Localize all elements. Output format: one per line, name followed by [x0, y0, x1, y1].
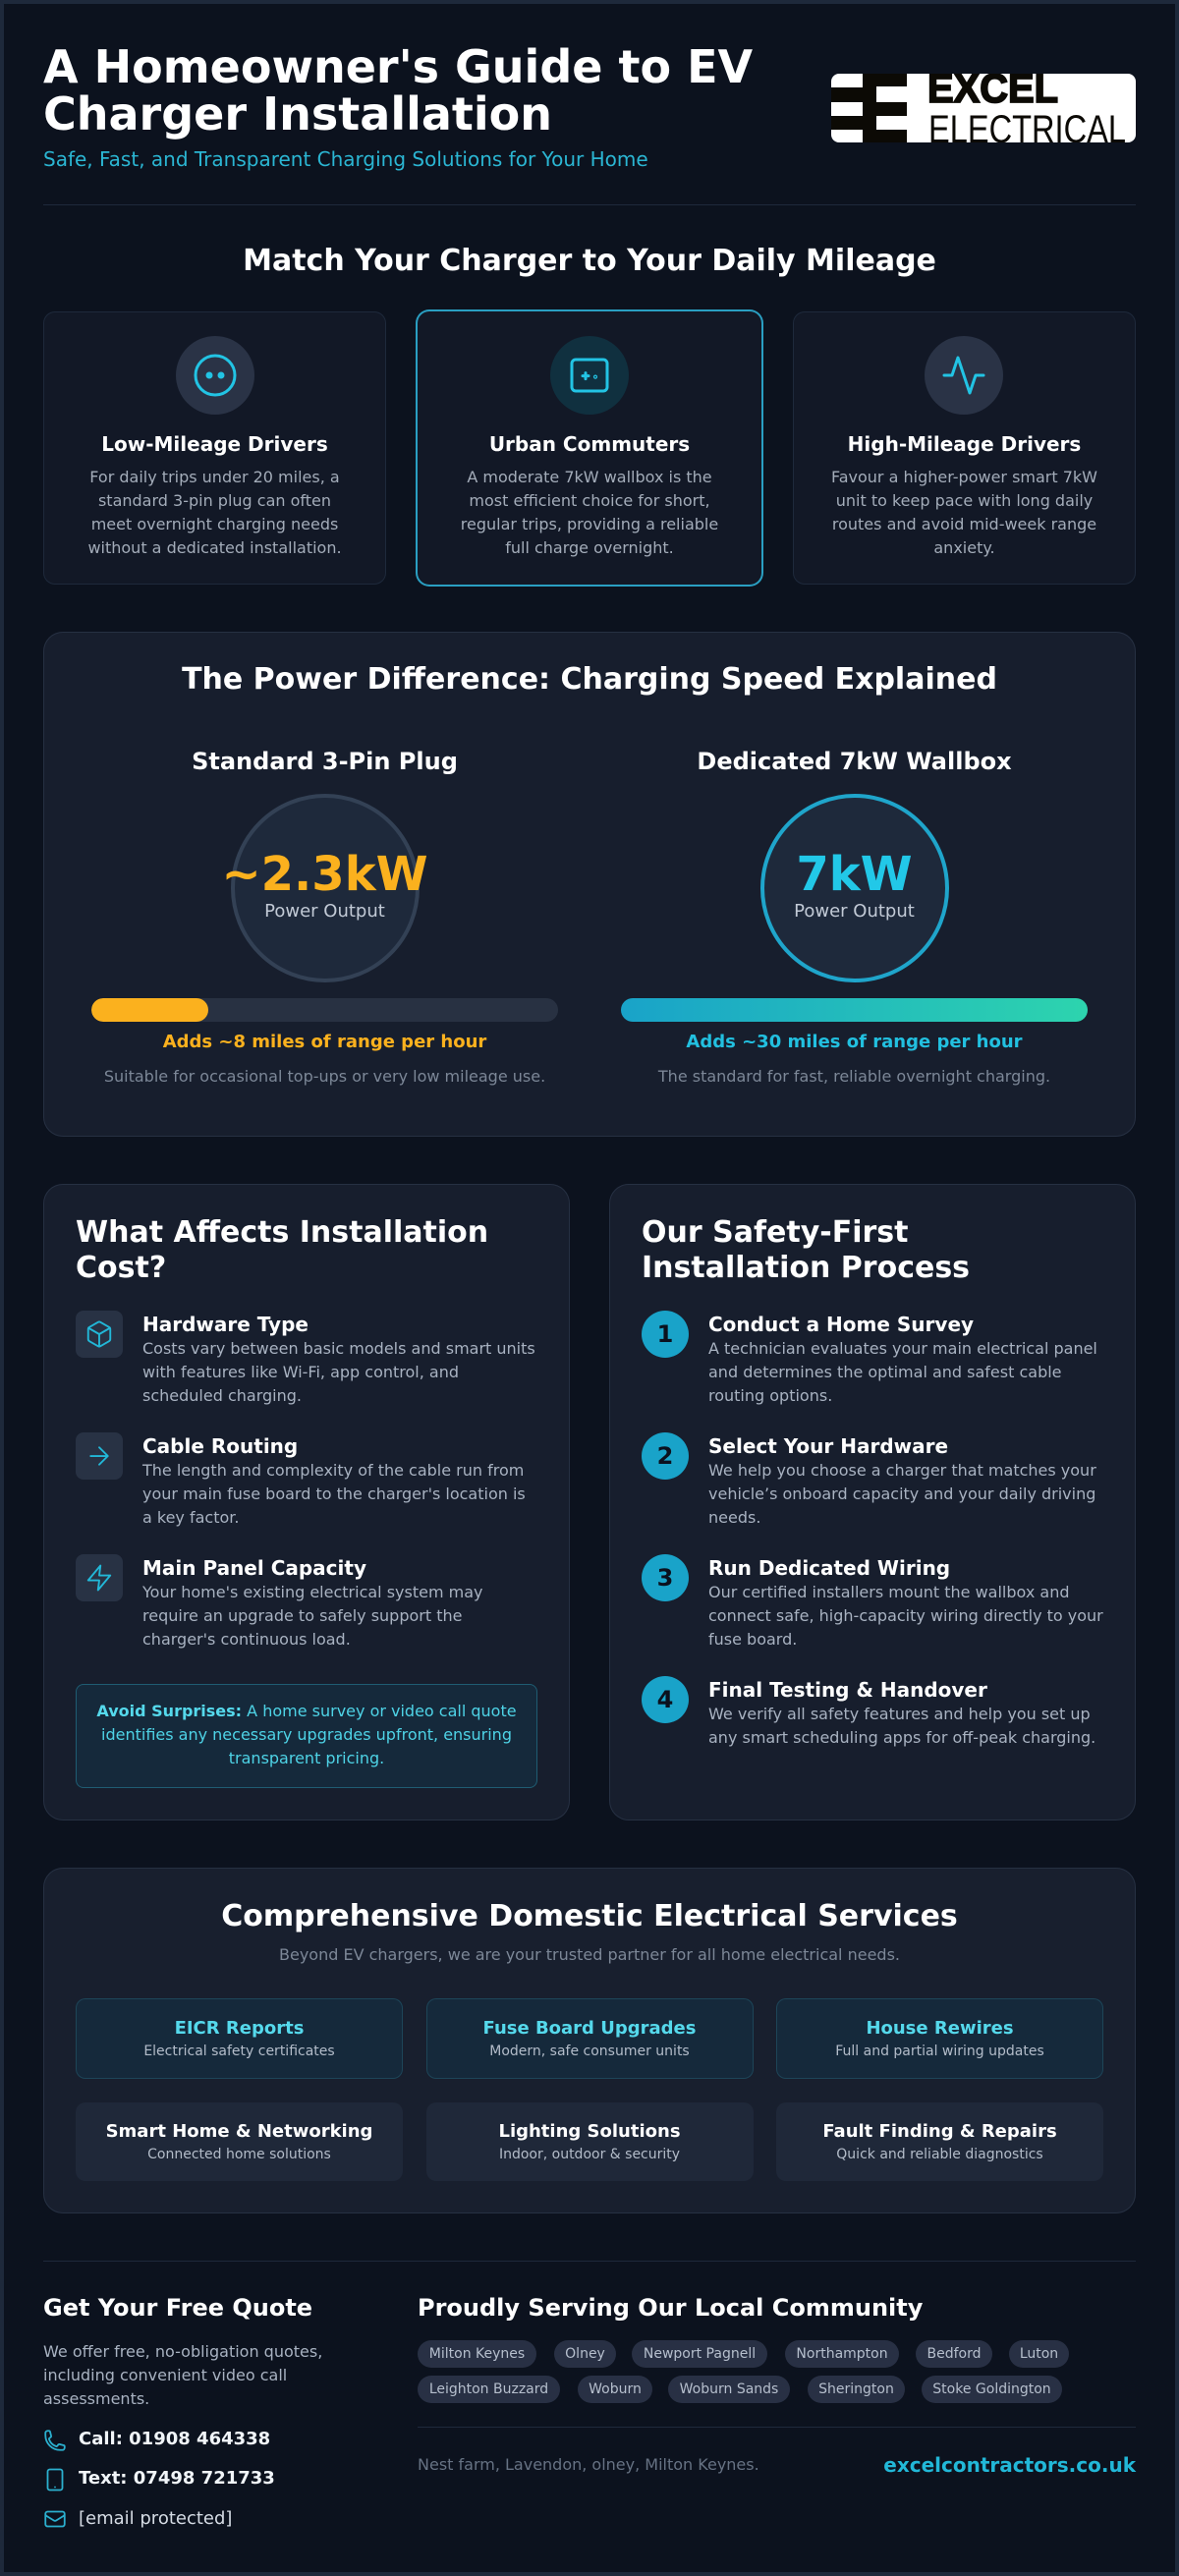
- heading: [76, 1215, 488, 1285]
- step text: connect safe, high-capacity wiring directly to your: [708, 1606, 1103, 1625]
- card text: unit to keep pace with long daily: [836, 491, 1093, 510]
- range text: Adds ~30 miles of range per hour: [686, 1032, 1023, 1052]
- service: EICR reports: [76, 1998, 403, 2079]
- icon: bolt: [76, 1554, 123, 1601]
- card text: regular trips, providing a reliable: [461, 515, 718, 533]
- bar chart: [91, 998, 558, 1022]
- step text: [708, 1705, 1095, 1747]
- panel: urban commuters: [416, 309, 763, 587]
- value label: Power Output: [794, 901, 915, 922]
- service: smart home: [76, 2102, 403, 2181]
- location tags: Sherington: [818, 2381, 894, 2397]
- step text: [708, 1339, 1097, 1405]
- step title: Select Your Hardware: [708, 1434, 948, 1458]
- logo: Excel Electrical: [831, 74, 1136, 142]
- service: smart home: Connected home solutions: [147, 2147, 331, 2162]
- location tags: Northampton: [796, 2346, 888, 2362]
- value: 7kW: [796, 847, 913, 902]
- item text: require an upgrade to safely support the: [142, 1606, 462, 1625]
- card text: anxiety.: [933, 538, 995, 557]
- value: ~2.3kW: [221, 847, 428, 902]
- step number: [642, 1676, 689, 1723]
- step title: Final Testing & Handover: [708, 1678, 987, 1702]
- item text: a key factor.: [142, 1508, 239, 1527]
- card text: For daily trips under 20 miles, a: [89, 468, 340, 486]
- heading: The Power Difference: Charging Speed Explained: [182, 662, 997, 697]
- gauge circle: [230, 794, 419, 982]
- quote text: We offer free, no-obligation quotes,: [43, 2342, 322, 2361]
- icon: cube: [76, 1311, 123, 1358]
- card text: [461, 468, 718, 557]
- value label: Power Output: [264, 901, 385, 922]
- icon: arrow: [76, 1432, 123, 1480]
- step text: Our certified installers mount the wallbox and: [708, 1583, 1069, 1601]
- icon: socket: [175, 336, 253, 415]
- column title: Dedicated 7kW Wallbox: [697, 748, 1012, 775]
- description: The standard for fast, reliable overnight charging.: [658, 1067, 1050, 1086]
- step number: 4: [657, 1686, 673, 1713]
- step number: [642, 1432, 689, 1480]
- bar fill: [91, 998, 208, 1022]
- step 3: [642, 1554, 1103, 1649]
- step text: A technician evaluates your main electrical panel: [708, 1339, 1097, 1358]
- heading: local community: Proudly Serving Our Local Community: [418, 2294, 923, 2322]
- item text: scheduled charging.: [142, 1386, 302, 1405]
- card text: [831, 468, 1097, 557]
- panel: installation cost: [43, 1184, 570, 1820]
- service: smart home: Smart Home & Networking: [106, 2121, 372, 2142]
- item text: [142, 1339, 535, 1405]
- gauge circle: [760, 794, 949, 982]
- panel: high-mileage drivers: [793, 311, 1136, 585]
- location tags: [418, 2340, 1069, 2403]
- step number: 3: [657, 1564, 673, 1592]
- service: EICR reports: Electrical safety certificates: [143, 2044, 335, 2059]
- location tags: Olney: [565, 2346, 605, 2362]
- service: fault finding: [776, 2102, 1103, 2181]
- subtitle: Safe, Fast, and Transparent Charging Solutions for Your Home: [43, 147, 648, 171]
- item text: Your home's existing electrical system may: [142, 1583, 482, 1601]
- heading: [642, 1215, 970, 1285]
- card text: routes and avoid mid-week range: [832, 515, 1096, 533]
- location tags: Woburn: [589, 2381, 642, 2397]
- item text: Costs vary between basic models and smart units: [142, 1339, 535, 1358]
- location tags: Newport Pagnell: [644, 2346, 756, 2362]
- callout: Avoid Surprises: A home survey or video call quote: [96, 1702, 517, 1720]
- service: fault finding: Fault Finding & Repairs: [822, 2121, 1057, 2142]
- item text: [142, 1583, 482, 1649]
- item text: with features like Wi-Fi, app control, and: [142, 1363, 459, 1381]
- card title: High-Mileage Drivers: [848, 432, 1081, 456]
- column: 3-pin plug: [91, 748, 558, 1086]
- step text: [708, 1461, 1096, 1527]
- card title: Low-Mileage Drivers: [101, 432, 328, 456]
- service: lighting: Lighting Solutions: [498, 2121, 681, 2142]
- service: EICR reports: EICR Reports: [175, 2018, 304, 2039]
- step text: [708, 1583, 1103, 1649]
- location tags: Luton: [1020, 2346, 1058, 2362]
- item title: Hardware Type: [142, 1313, 309, 1336]
- callout: transparent pricing.: [229, 1749, 384, 1767]
- card text: A moderate 7kW wallbox is the: [467, 468, 712, 486]
- service: house rewires: House Rewires: [866, 2018, 1014, 2039]
- step text: fuse board.: [708, 1630, 797, 1649]
- step number: [642, 1311, 689, 1358]
- step text: any smart scheduling apps for off-peak charging.: [708, 1728, 1095, 1747]
- step number: 2: [657, 1442, 673, 1470]
- address: Nest farm, Lavendon, olney, Milton Keynes.: [418, 2455, 759, 2474]
- panel: power difference: [43, 632, 1136, 1137]
- icon: mobile: [47, 2468, 63, 2492]
- text number: Text: 07498 721733: [79, 2468, 275, 2489]
- title: Charger Installation: [43, 86, 552, 140]
- heading: Comprehensive Domestic Electrical Services: [221, 1899, 958, 1933]
- service: lighting: Indoor, outdoor & security: [499, 2147, 680, 2162]
- call number: Call: 01908 464338: [79, 2429, 270, 2449]
- card text: without a dedicated installation.: [87, 538, 342, 557]
- service: fuse board upgrades: [426, 1998, 753, 2079]
- step text: We help you choose a charger that matches your: [708, 1461, 1096, 1480]
- card text: Favour a higher-power smart 7kW: [831, 468, 1097, 486]
- step 4: [642, 1676, 1095, 1747]
- location tags: Stoke Goldington: [932, 2381, 1051, 2397]
- panel: domestic services: [43, 1868, 1136, 2213]
- panel: low-mileage drivers: [43, 311, 386, 585]
- heading: free quote: Get Your Free Quote: [43, 2294, 312, 2322]
- location tags: Woburn Sands: [680, 2381, 778, 2397]
- callout: identifies any necessary upgrades upfront, ensuring: [101, 1725, 512, 1744]
- column title: Standard 3-Pin Plug: [192, 748, 458, 775]
- heading: Installation Process: [642, 1251, 970, 1285]
- icon: wallbox: [550, 336, 629, 415]
- quote text: including convenient video call: [43, 2366, 287, 2384]
- step number: 1: [657, 1320, 673, 1348]
- step text: vehicle’s onboard capacity and your daily driving: [708, 1484, 1095, 1503]
- panel: installation process: [609, 1184, 1136, 1820]
- item: hardware type: [76, 1311, 535, 1405]
- icon: phone: [44, 2430, 66, 2451]
- icon: pulse: [925, 336, 1003, 415]
- callout: [76, 1684, 537, 1788]
- service: fuse board upgrades: Modern, safe consumer units: [489, 2044, 690, 2059]
- heading: What Affects Installation: [76, 1215, 488, 1250]
- icon: mail: [44, 2511, 66, 2527]
- quote text: assessments.: [43, 2389, 149, 2408]
- heading: Cost?: [76, 1251, 166, 1285]
- step text: routing options.: [708, 1386, 832, 1405]
- step text: and determines the optimal and safest cable: [708, 1363, 1062, 1381]
- website: excelcontractors.co.uk: [883, 2453, 1136, 2477]
- card text: most efficient choice for short,: [469, 491, 710, 510]
- card title: Urban Commuters: [489, 432, 690, 456]
- step title: Run Dedicated Wiring: [708, 1556, 950, 1580]
- service: house rewires: [776, 1998, 1103, 2079]
- item text: charger's continuous load.: [142, 1630, 351, 1649]
- bar chart: [621, 998, 1088, 1022]
- service: lighting: [426, 2102, 753, 2181]
- card text: meet overnight charging needs: [91, 515, 338, 533]
- description: Suitable for occasional top-ups or very low mileage use.: [104, 1067, 545, 1086]
- item: cable routing: [76, 1432, 526, 1527]
- range text: Adds ~8 miles of range per hour: [163, 1032, 486, 1052]
- item title: Cable Routing: [142, 1434, 298, 1458]
- title: A Homeowner's Guide to EV: [43, 39, 753, 92]
- subheading: Beyond EV chargers, we are your trusted partner for all home electrical needs.: [279, 1945, 900, 1964]
- card text: full charge overnight.: [505, 538, 674, 557]
- heading: Our Safety-First: [642, 1215, 908, 1250]
- item text: The length and complexity of the cable run from: [142, 1461, 524, 1480]
- location tags: Bedford: [927, 2346, 981, 2362]
- service: fault finding: Quick and reliable diagnostics: [836, 2147, 1043, 2162]
- location tags: Milton Keynes: [429, 2346, 525, 2362]
- item text: your main fuse board to the charger's location is: [142, 1484, 526, 1503]
- service: house rewires: Full and partial wiring updates: [835, 2044, 1044, 2059]
- column: wallbox: [621, 748, 1088, 1086]
- email: [email protected]: [79, 2508, 232, 2529]
- title: [43, 39, 753, 140]
- quote text: [43, 2342, 322, 2408]
- service: fuse board upgrades: Fuse Board Upgrades: [483, 2018, 696, 2039]
- step number: [642, 1554, 689, 1601]
- step text: We verify all safety features and help you set up: [708, 1705, 1091, 1723]
- step 1: [642, 1311, 1097, 1405]
- card text: standard 3-pin plug can often: [98, 491, 331, 510]
- card text: [87, 468, 342, 557]
- step text: needs.: [708, 1508, 760, 1527]
- heading: match your charger: Match Your Charger to Your Daily Mileage: [243, 244, 936, 278]
- item title: Main Panel Capacity: [142, 1556, 366, 1580]
- item text: [141, 1461, 526, 1527]
- step title: Conduct a Home Survey: [708, 1313, 974, 1336]
- step 2: [642, 1432, 1096, 1527]
- item: panel capacity: [76, 1554, 482, 1649]
- location tags: Leighton Buzzard: [429, 2381, 548, 2397]
